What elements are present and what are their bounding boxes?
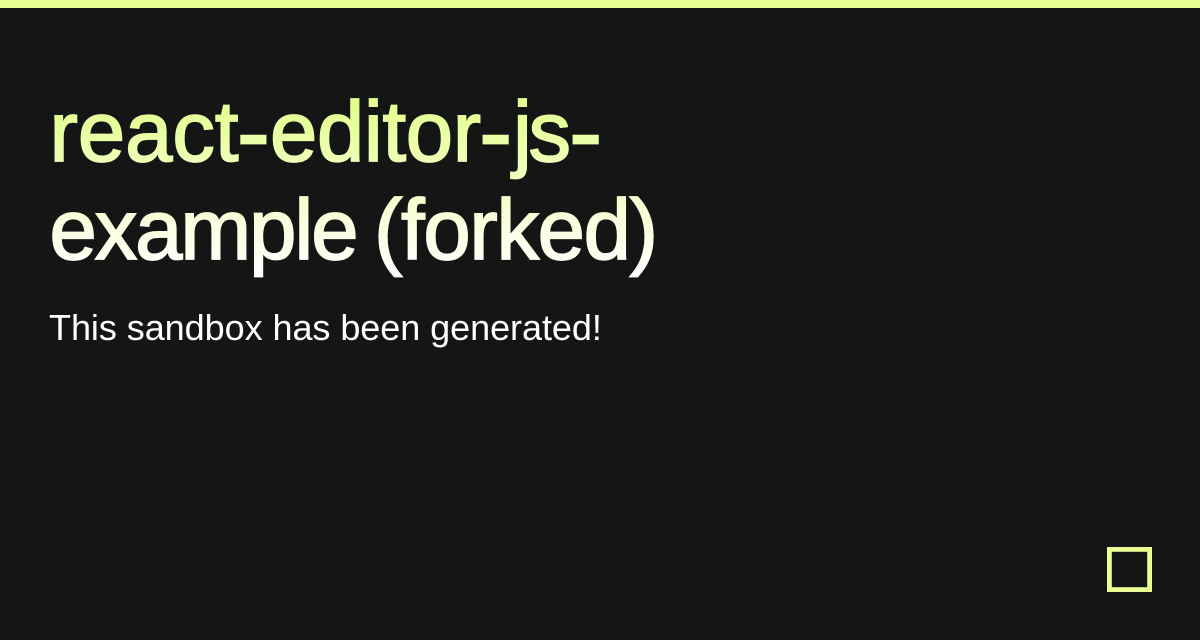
title: - [569,76,602,188]
subtitle: This sandbox has been generated! [49,307,602,348]
title: (forked) [374,183,658,278]
title: example [50,183,358,278]
title: react [50,85,238,180]
title: - [479,76,512,188]
title: js [510,85,571,180]
title [50,76,658,278]
top accent bar [0,0,1200,8]
icon: logo square [1107,547,1152,592]
title: editor [270,85,481,180]
title: - [237,76,270,188]
